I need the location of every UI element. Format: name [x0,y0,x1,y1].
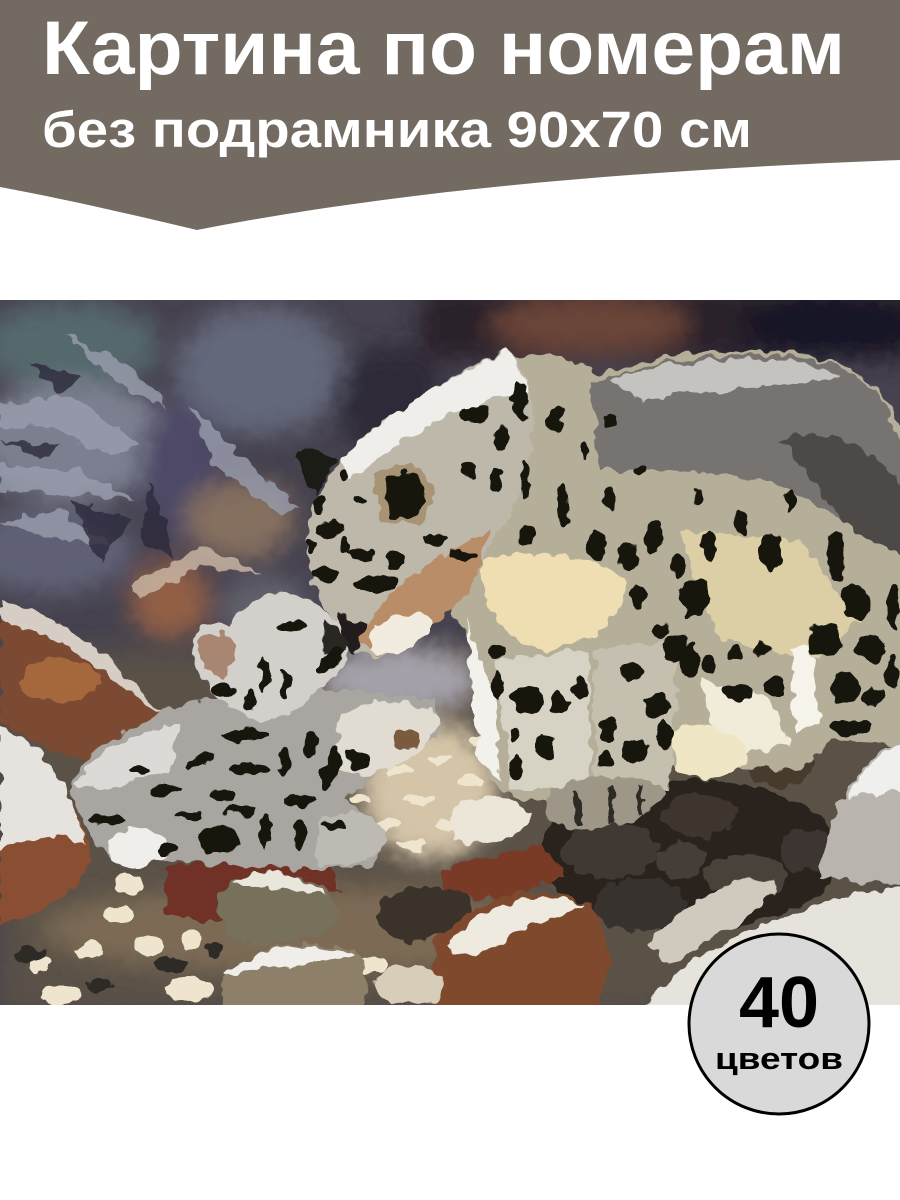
ground glow and pebbles [0,645,900,1015]
subtitle: без подрамника 90х70 см [42,101,752,158]
painting: snow leopard with cub [0,285,900,1015]
badge: 40 colours [689,934,869,1114]
badge label: цветов [715,1041,843,1076]
title: Картина по номерам [42,6,845,91]
mother head [295,350,533,656]
cub stripes [87,621,419,856]
painting background: cave rocks [0,285,900,1015]
cub leopard [70,594,438,870]
mother body [400,350,900,800]
cub body [70,690,438,870]
mother spots [305,382,899,779]
mother paws [447,776,665,844]
header banner [0,0,900,230]
cub head [190,594,350,720]
foreground rocks [0,600,900,1015]
badge number: 40 [739,963,819,1043]
mother leopard [295,350,900,844]
dark stones right [542,760,832,934]
